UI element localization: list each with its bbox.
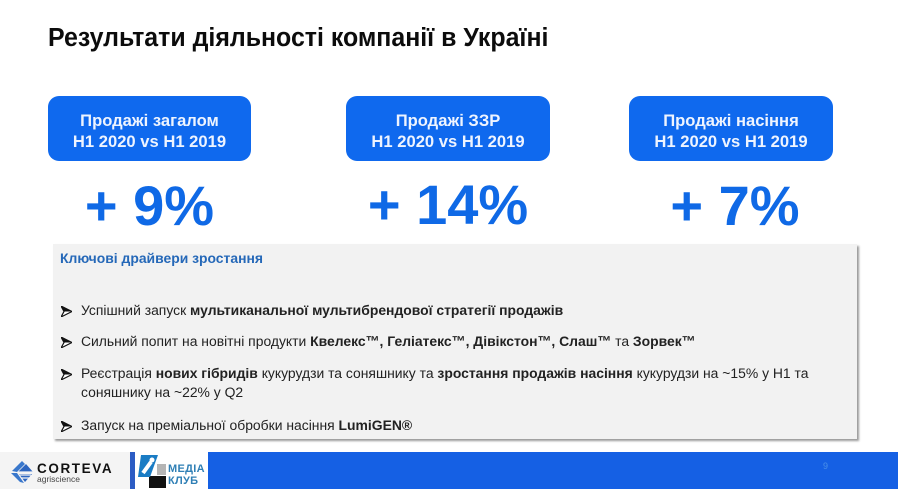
- panel: CPP sales header: [346, 96, 550, 161]
- bullet 3: соняшнику на ~22% у Q2: [81, 385, 243, 401]
- bullet 1: Успішний запуск мультиканальної мультибрендової стратегії продажів: [81, 303, 563, 319]
- footer bar: [208, 452, 898, 489]
- logo: Corteva: agriscience: [37, 474, 80, 484]
- CPP sales growth figure: + 14%: [368, 173, 528, 236]
- seed sales growth figure: + 7%: [670, 174, 800, 237]
- bullet 3: Реєстрація нових гібридів кукурудзи та соняшнику та зростання продажів насіння кукурудзи на ~15% у H1 та: [81, 366, 808, 382]
- page number: 9: [823, 461, 828, 471]
- bullet 3: [61, 366, 808, 401]
- bullet 2: Сильний попит на новітні продукти Квелекс™, Геліатекс™, Дівікстон™, Слаш™ та Зорвек™: [81, 334, 696, 350]
- heading: key growth drivers: Ключові драйвери зростання: [60, 251, 263, 267]
- logo: Media Club: МЕДІА: [168, 463, 205, 475]
- logo: Media Club: КЛУБ: [168, 475, 198, 487]
- title: Результати діяльності компанії в Україні: [48, 24, 548, 52]
- panel: total sales header: H1 2020 vs H1 2019: [73, 132, 226, 151]
- logo: Media Club: [130, 452, 208, 489]
- panel: seed sales header: [629, 96, 833, 161]
- panel: seed sales header: Продажі насіння: [663, 111, 799, 130]
- panel: CPP sales header: H1 2020 vs H1 2019: [371, 132, 525, 151]
- icon: microphone tile: [138, 455, 166, 488]
- panel: key growth drivers: [53, 244, 857, 439]
- icon: Corteva globe mark: [11, 461, 32, 483]
- panel: total sales header: Продажі загалом: [80, 111, 219, 130]
- panel: seed sales header: H1 2020 vs H1 2019: [654, 132, 808, 151]
- logo left stripe: [130, 452, 135, 489]
- bullet 4: Запуск на преміальної обробки насіння LumiGEN®: [81, 418, 412, 434]
- logo: Corteva: [11, 461, 113, 484]
- panel: CPP sales header: Продажі ЗЗР: [396, 111, 500, 130]
- logo: Corteva: CORTEVA: [37, 461, 113, 476]
- panel: total sales header: [48, 96, 251, 161]
- footer logo area background: [0, 452, 130, 489]
- total sales growth figure: + 9%: [85, 174, 214, 237]
